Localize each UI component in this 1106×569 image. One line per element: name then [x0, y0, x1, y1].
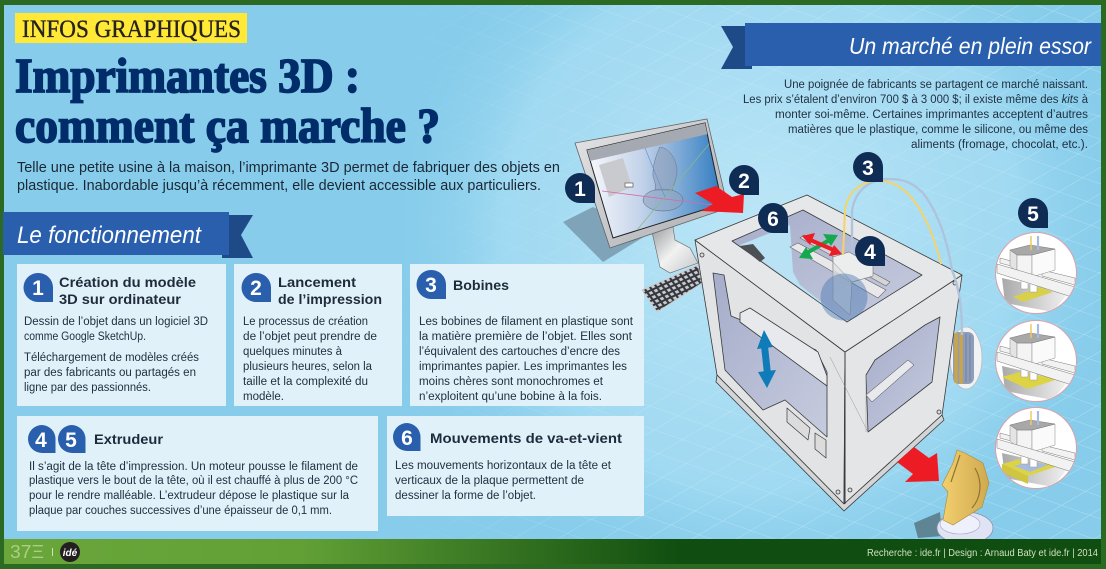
body step 6: verticaux de la plaque permettent de — [395, 475, 584, 487]
printer body — [695, 195, 962, 511]
body step 3: l’équivalent des cartouches d’encre des — [419, 346, 620, 358]
panel: step 4 and 5 — [17, 416, 378, 531]
body step 3: la matière première de l’objet. Elles sont — [419, 331, 633, 343]
marker 2 — [729, 165, 759, 195]
body step 1: Téléchargement de modèles créés — [24, 352, 199, 364]
publisher mark: 37Ξ — [10, 542, 44, 562]
tag: infos graphiques: INFOS GRAPHIQUES — [22, 15, 241, 43]
detail circle: stacked layers — [996, 408, 1076, 488]
banner: le fonctionnement — [3, 212, 253, 258]
marker 1: 1 — [574, 178, 586, 201]
body step 3 — [419, 316, 634, 403]
heading step 2: de l’impression — [278, 291, 382, 307]
illustration: printer — [695, 179, 982, 511]
body extrudeur: plaque par couches successives d’une épaisseur de 0,1 mm. — [29, 505, 332, 517]
heading step 1: 3D sur ordinateur — [59, 291, 182, 307]
arrow: printer to object — [897, 447, 939, 482]
marker 2: 2 — [738, 170, 750, 193]
body step 6: dessiner la forme de l’objet. — [395, 490, 536, 502]
badge 2: 2 — [250, 277, 262, 300]
intro text: Telle une petite usine à la maison, l’imprimante 3D permet de fabriquer des objets en — [17, 160, 560, 176]
marker 3 — [853, 152, 883, 182]
zoom spot on print head — [820, 274, 868, 320]
marker 1 — [565, 173, 595, 203]
illustration: computer — [563, 119, 728, 312]
heading step 1: Création du modèle — [59, 274, 196, 290]
body extrudeur: Il s’agit de la tête d’impression. Un moteur pousse le filament de — [29, 461, 358, 473]
badge 5: 5 — [65, 429, 77, 452]
filament: yellow — [843, 181, 941, 264]
heading step 2 — [278, 274, 382, 307]
title — [15, 50, 440, 154]
badge 3: 3 — [425, 274, 437, 297]
intro text — [17, 160, 560, 194]
filament spool — [950, 327, 982, 389]
badge 6: 6 — [401, 427, 413, 450]
body step 2: taille et la complexité du — [243, 376, 368, 388]
market text: Une poignée de fabricants se partagent ce marché naissant. — [784, 79, 1088, 91]
market text: Les prix s’étalent d’environ 700 $ à 3 000 $; il existe même des kits à — [743, 94, 1089, 106]
panel: step 3 — [410, 264, 644, 406]
market text: monter soi-même. Certaines imprimantes acceptent d’autres — [775, 109, 1088, 121]
marker 5 — [1018, 198, 1048, 228]
arrow: computer to printer — [695, 186, 744, 213]
banner: le fonctionnement: Le fonctionnement — [17, 222, 202, 249]
heading extrudeur: Extrudeur — [94, 431, 164, 447]
body step 6: Les mouvements horizontaux de la tête et — [395, 460, 612, 472]
marker 6: 6 — [767, 208, 779, 231]
footer — [4, 539, 1101, 564]
body step 3: moins chères sont monochromes et — [419, 376, 604, 388]
body step 2: quelques minutes à — [243, 346, 343, 358]
body step 2: Le processus de création — [243, 316, 368, 328]
printed knight — [914, 450, 993, 544]
body extrudeur: pour le rendre malléable. L’extrudeur dépose le plastique sur la — [29, 490, 350, 502]
marker 3: 3 — [862, 157, 874, 180]
body step 1: Dessin de l’objet dans un logiciel 3D — [24, 316, 208, 328]
filament: blue — [852, 179, 962, 335]
title: Imprimantes 3D : — [15, 50, 360, 104]
body step 2: de l’objet peut prendre de — [243, 331, 377, 343]
badge 2 — [242, 273, 271, 302]
detail circle: first layer — [996, 232, 1076, 314]
body step 1: comme Google SketchUp. — [24, 331, 146, 343]
ide logo — [60, 542, 80, 562]
body step 2: plusieurs heures, selon la — [243, 361, 373, 373]
panel: step 2 — [234, 264, 402, 406]
body step 1: par des fabricants ou partagés en — [24, 367, 196, 379]
badge 4: 4 — [35, 429, 47, 452]
badge 4 — [28, 425, 56, 453]
panel: step 1 — [17, 264, 226, 406]
body step 2: modèle. — [243, 391, 284, 403]
banner: un marché en plein essor — [721, 23, 1101, 69]
body step 3: Les bobines de filament en plastique sont — [419, 316, 634, 328]
market text: aliments (fromage, chocolat, etc.). — [911, 139, 1088, 151]
body step 6 — [395, 460, 612, 502]
body step 1 — [24, 316, 208, 394]
badge 6 — [393, 423, 421, 451]
marker 6 — [758, 203, 788, 233]
panel: step 6 — [387, 416, 644, 516]
badge 1 — [24, 273, 53, 302]
heading step 3: Bobines — [453, 277, 509, 293]
badge 5 — [58, 425, 86, 453]
heading step 6: Mouvements de va-et-vient — [430, 430, 622, 446]
intro text: plastique. Inabordable jusqu’à récemment, elle devient accessible aux particuliers. — [17, 178, 541, 194]
market text — [743, 79, 1089, 151]
body step 2 — [243, 316, 377, 403]
body step 3: imprimantes papier. Les imprimantes les — [419, 361, 627, 373]
banner: un marché en plein essor: Un marché en plein essor — [849, 33, 1092, 59]
marker 4: 4 — [864, 241, 876, 264]
body step 1: ligne par des passionnés. — [24, 382, 151, 394]
build plate lift arrow — [757, 330, 776, 388]
market text: matières que le plastique, comme le silicone, ou même des — [788, 124, 1088, 136]
marker 5: 5 — [1027, 203, 1039, 226]
print head — [790, 235, 890, 315]
badge 3 — [416, 270, 446, 299]
body step 3: n’exploitent qu’une bobine à la fois. — [419, 391, 602, 403]
separator — [52, 548, 53, 556]
body extrudeur — [29, 461, 358, 517]
heading step 2: Lancement — [278, 274, 356, 290]
ide logo: idé — [63, 548, 78, 559]
badge 1: 1 — [32, 277, 44, 300]
heading step 1 — [59, 274, 196, 307]
marker 4 — [855, 236, 885, 266]
head movement arrows — [799, 233, 842, 259]
title: comment ça marche ? — [15, 100, 440, 154]
body extrudeur: plastique vers le bout de la tête, où il est chauffé à plus de 200 °C — [29, 475, 358, 487]
detail circle: filled layer — [996, 320, 1076, 402]
